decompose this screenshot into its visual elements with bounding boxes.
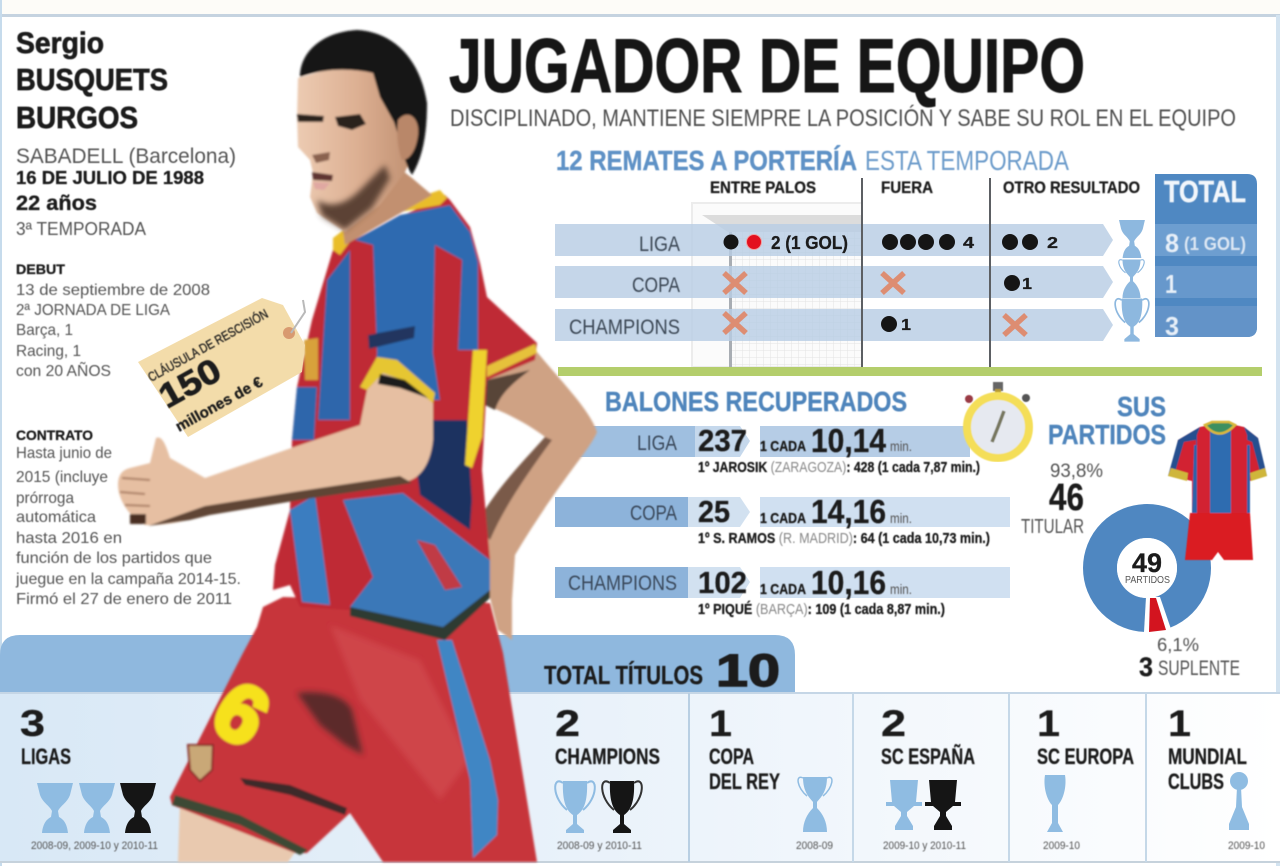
row: liga recoveries: 1º JAROSIK (ZARAGOZA): 428 (1 cada 7,87 min.) — [698, 459, 980, 476]
trophy group: sc europa: 2009-10 — [1043, 840, 1080, 852]
trophy group: mundial clubs — [1168, 703, 1265, 852]
panel: matches played — [1021, 391, 1267, 682]
substitute stat: 3 — [1139, 652, 1153, 682]
goal illustration — [692, 203, 862, 367]
heading: shots: 12 REMATES A PORTERÍA — [556, 145, 857, 176]
heading: total titles: 10 — [716, 645, 780, 696]
tag text: CLÁUSULA DE RESCISIÓN — [145, 306, 271, 385]
row: copa shots: 1 — [1022, 276, 1032, 293]
shorts number: 6 — [197, 664, 284, 765]
row: champions recoveries: 1 CADA — [760, 581, 806, 598]
starter stat: 93,8% — [1050, 461, 1103, 482]
row: liga shots: 2 (1 GOL) — [771, 233, 848, 253]
contract text: 2015 (incluye — [16, 469, 108, 486]
tag text: 150 — [152, 351, 228, 416]
column headers: FUERA — [881, 178, 933, 197]
sleeve patch — [368, 326, 415, 349]
row: copa recoveries: 1º S. RAMOS (R. MADRID): 64 (1 cada 10,73 min.) — [698, 530, 990, 547]
row: champions shots: 1 — [901, 317, 911, 334]
row: copa recoveries — [555, 493, 1010, 547]
panel: shots on goal — [555, 145, 1257, 367]
debut text: Barça, 1 — [16, 322, 73, 339]
debut text: 13 de septiembre de 2008 — [16, 282, 210, 299]
contract text: Firmó el 27 de enero de 2011 — [16, 591, 232, 608]
icon: stopwatch — [965, 382, 1030, 458]
heading: shots — [556, 145, 1069, 176]
heading: recovered balls: BALONES RECUPERADOS — [605, 386, 907, 417]
icon: kit — [1168, 422, 1267, 560]
debut text — [16, 261, 210, 380]
row: liga shots — [724, 233, 1058, 253]
eyes and mouth — [297, 114, 324, 122]
row: champions recoveries: 1º PIQUÉ (BARÇA): 109 (1 cada 8,87 min.) — [698, 601, 945, 618]
player name — [16, 27, 168, 135]
birth data — [16, 145, 236, 239]
starter stat: 46 — [1049, 477, 1084, 519]
substitute stat: 6,1% — [1157, 635, 1199, 655]
row labels: LIGA — [639, 233, 680, 256]
trophy group: sc europa: 1 — [1037, 703, 1060, 744]
donut chart: 49 — [1132, 548, 1162, 578]
debut text: 2ª JORNADA DE LIGA — [16, 302, 170, 319]
near arm — [118, 373, 433, 525]
substitute stat: SUPLENTE — [1158, 657, 1240, 680]
debut text: con 20 AÑOS — [16, 360, 111, 380]
ear — [397, 115, 418, 160]
contract text: prórroga — [16, 490, 74, 507]
row: liga recoveries: 1 CADA — [760, 438, 806, 455]
row labels — [569, 233, 680, 339]
total column: (1 GOL) — [1184, 234, 1246, 254]
heading: total titles: TOTAL TÍTULOS — [544, 660, 703, 690]
trophy group: mundial clubs: 2009-10 — [1228, 840, 1265, 852]
birth data: SABADELL (Barcelona) — [16, 145, 236, 168]
trophy group: sc europa: SC EUROPA — [1037, 744, 1134, 769]
row labels: COPA — [632, 274, 680, 297]
contract text: función de los partidos que — [16, 550, 212, 567]
total titles band — [0, 635, 795, 692]
trophy group: champions — [555, 703, 660, 852]
heading: shots: ESTA TEMPORADA — [865, 145, 1069, 176]
birth data: 22 años — [16, 192, 97, 215]
trophy group: copa del rey: 2008-09 — [796, 840, 833, 852]
trophy group: sc españa: 2009-10 y 2010-11 — [883, 840, 966, 852]
row: copa recoveries: 1 CADA — [760, 510, 806, 527]
panel: recovered balls — [555, 382, 1030, 618]
price tag — [138, 298, 305, 437]
total column: 1 — [1165, 269, 1177, 299]
player name: BUSQUETS — [16, 62, 168, 97]
row: liga shots: 2 — [1047, 235, 1058, 252]
panel: trophies by competition — [20, 703, 1265, 852]
trophies background — [0, 693, 1280, 862]
total column: 8 — [1165, 228, 1179, 258]
player photo illustration — [118, 30, 597, 862]
row: champions recoveries: CHAMPIONS — [568, 572, 677, 595]
starter stat — [1021, 461, 1103, 538]
total column: 3 — [1165, 311, 1179, 341]
row: liga recoveries — [578, 422, 980, 476]
row: copa recoveries: min. — [890, 510, 912, 526]
total column: TOTAL — [1164, 174, 1246, 209]
trophy group: champions: 2008-09 y 2010-11 — [557, 840, 642, 852]
debut text: Racing, 1 — [16, 343, 81, 360]
trophy group: sc españa — [881, 703, 975, 852]
trophy group: ligas: 2008-09, 2009-10 y 2010-11 — [31, 840, 158, 852]
title block: player name and data — [15, 27, 241, 608]
row: champions shots — [724, 313, 1026, 335]
heading: matches — [1048, 391, 1166, 450]
trophy group: copa del rey: DEL REY — [709, 769, 780, 794]
debut text: DEBUT — [16, 261, 65, 277]
trophy group: sc españa: 2 — [881, 703, 906, 744]
contract text: CONTRATO — [16, 427, 93, 443]
waist shadow — [350, 590, 490, 640]
green divider — [558, 367, 1262, 376]
heading: matches: SUS — [1117, 391, 1166, 422]
trophy group: sc europa — [1037, 703, 1134, 852]
row labels: CHAMPIONS — [569, 316, 680, 339]
trophy group: ligas — [20, 703, 158, 852]
row bands — [555, 224, 1113, 341]
trophy group: sc españa: SC ESPAÑA — [881, 744, 975, 769]
donut chart: PARTIDOS — [1125, 575, 1170, 586]
row: copa recoveries: 25 — [698, 494, 730, 529]
row: copa shots — [724, 273, 1032, 293]
total column — [1155, 174, 1257, 341]
trophy group: mundial clubs: CLUBS — [1168, 769, 1224, 794]
row: champions recoveries: min. — [890, 581, 912, 597]
trophy group: mundial clubs: 1 — [1168, 703, 1191, 744]
trophy group: ligas: 3 — [20, 703, 45, 744]
column headers — [710, 178, 1140, 197]
far arm — [476, 352, 597, 640]
row: copa recoveries: COPA — [630, 502, 677, 525]
contract text — [15, 427, 241, 608]
row: liga recoveries: LIGA — [637, 432, 677, 455]
column headers: ENTRE PALOS — [710, 178, 816, 197]
contract text: Hasta junio de — [16, 445, 112, 462]
row: champions recoveries: 102 — [698, 565, 747, 600]
column dividers — [862, 178, 990, 367]
trophy group: copa del rey: COPA — [709, 744, 754, 769]
contract text: juegue en la campaña 2014-15. — [15, 571, 241, 588]
row: liga recoveries: 237 — [698, 423, 747, 458]
row: liga recoveries: 10,14 — [811, 422, 887, 459]
club crest — [188, 745, 213, 781]
trophy group: copa del rey — [709, 703, 833, 852]
birth data: 16 DE JULIO DE 1988 — [16, 168, 204, 188]
trophy group: champions: CHAMPIONS — [555, 744, 660, 769]
panel: total titles bottom strip — [0, 635, 1280, 863]
chest crest — [304, 338, 318, 380]
row: liga recoveries: min. — [890, 438, 912, 454]
trophy group: copa del rey: 1 — [709, 703, 732, 744]
tag text — [145, 306, 271, 435]
row: liga shots: 4 — [963, 235, 974, 252]
jersey — [273, 190, 537, 640]
head — [297, 30, 432, 245]
near leg — [178, 800, 300, 862]
trophy group: ligas: LIGAS — [21, 744, 71, 769]
column headers: OTRO RESULTADO — [1003, 178, 1140, 197]
near sleeve cuff — [360, 357, 435, 403]
row: champions recoveries — [555, 564, 1010, 618]
birth data: 3ª TEMPORADA — [16, 219, 146, 239]
trophy group: mundial clubs: MUNDIAL — [1168, 744, 1247, 769]
main title: JUGADOR DE EQUIPO — [449, 24, 1085, 109]
tag hole — [283, 327, 295, 339]
contract text: automática — [16, 509, 96, 526]
starter stat: TITULAR — [1021, 516, 1084, 538]
row: copa recoveries: 14,16 — [811, 493, 886, 530]
substitute stat — [1139, 635, 1240, 682]
row: champions recoveries: 10,16 — [811, 564, 886, 601]
contract text: hasta 2016 en — [16, 530, 122, 547]
donut chart — [1100, 521, 1194, 632]
trophy group: champions: 2 — [555, 703, 580, 744]
heading: total titles — [544, 645, 780, 696]
jersey collar — [333, 190, 447, 255]
trophies column — [1115, 220, 1149, 342]
tag text: millones de € — [173, 373, 266, 435]
shorts — [170, 597, 537, 862]
hair — [300, 30, 427, 175]
heading: matches: PARTIDOS — [1048, 419, 1166, 450]
player name: Sergio — [16, 27, 104, 60]
player name: BURGOS — [16, 100, 138, 135]
